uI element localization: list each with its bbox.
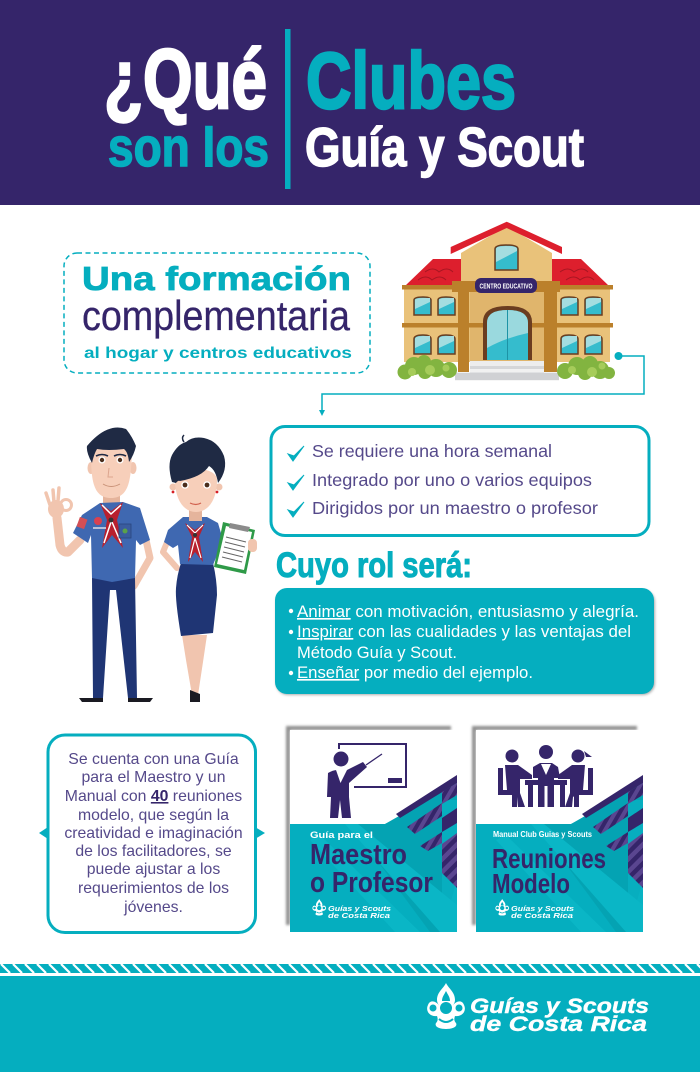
shirt	[164, 517, 223, 565]
cover logo	[312, 899, 391, 920]
cover shadow	[286, 726, 451, 925]
callout: una formación complementaria: Una formación	[82, 260, 351, 297]
eyes and smile	[98, 456, 106, 464]
cover art	[476, 730, 643, 932]
panel: guide description	[39, 735, 265, 932]
panel: guide description: requerimientos de los	[78, 880, 229, 897]
title: ¿Qué son los: son los	[108, 116, 269, 178]
connector arrow from school to list	[319, 352, 644, 416]
cover art	[290, 730, 457, 932]
footer logo: Guías y Scouts	[470, 995, 649, 1018]
panel: guide description: creatividad e imaginación	[64, 825, 243, 842]
illustration: school building	[398, 222, 615, 380]
icon: people at a table	[498, 745, 593, 807]
shoe	[190, 690, 200, 702]
panel: guide description: para el Maestro y un	[81, 769, 226, 786]
panel: role list: Enseñar por medio del ejemplo.	[297, 664, 533, 682]
title: Clubes Guía y Scout: Clubes	[306, 36, 516, 125]
illustration: scout woman	[163, 435, 257, 702]
door	[483, 306, 532, 360]
hair and bun	[170, 438, 225, 483]
footer logo	[427, 983, 649, 1036]
skirt	[176, 563, 217, 636]
footer band	[0, 964, 700, 1072]
columns and beam	[458, 290, 469, 372]
illustration: scout man	[46, 428, 153, 702]
cover logo: de Costa Rica	[511, 911, 573, 920]
icon: teacher at board	[327, 743, 407, 818]
windows	[414, 245, 602, 354]
side roofs	[406, 259, 461, 285]
sign: CENTRO EDUCATIVO	[480, 282, 533, 290]
face	[170, 484, 176, 490]
bushes	[398, 355, 615, 380]
check marks	[288, 446, 304, 517]
callout: una formación complementaria: al hogar y centros educativos	[84, 345, 352, 362]
clipboard	[214, 522, 255, 574]
badges	[77, 517, 87, 529]
cover logo	[495, 899, 574, 920]
central gable wall	[461, 226, 552, 288]
sign	[475, 278, 537, 293]
trousers	[92, 578, 137, 698]
panel: guide description: modelo, que según la	[78, 807, 229, 824]
neckerchief	[100, 502, 123, 548]
shirt	[73, 502, 150, 582]
panel: requirements checklist	[271, 426, 649, 536]
book cover: Maestro o Profesor	[286, 726, 457, 932]
book cover: Maestro o Profesor: Maestro	[310, 839, 407, 871]
hair	[87, 428, 136, 463]
walls	[404, 289, 610, 362]
header band	[0, 0, 700, 205]
panel: guide description: puede ajustar a los	[87, 861, 220, 878]
panel: role list: Método Guía y Scout.	[297, 644, 457, 662]
neck	[189, 504, 202, 521]
bands	[402, 285, 613, 290]
gable roof	[451, 222, 562, 254]
panel: guide description: jóvenes.	[123, 899, 183, 916]
other arm	[134, 540, 150, 586]
callout: una formación complementaria: complementaria	[82, 292, 351, 339]
holding hand	[248, 539, 257, 552]
neck	[103, 488, 120, 508]
cover logo: Guías y Scouts	[511, 904, 574, 913]
title divider	[285, 29, 290, 189]
callout: una formación complementaria	[64, 253, 370, 373]
panel: role list: Animar con motivación, entusiasmo y alegría.	[297, 603, 639, 621]
ears and face	[88, 462, 94, 474]
icon: fleur-de-lis	[427, 983, 465, 1029]
shoes	[79, 698, 153, 702]
title: ¿Qué son los: ¿Qué	[104, 32, 267, 126]
cover logo: de Costa Rica	[328, 911, 390, 920]
list text: Se requiere una hora semanal	[312, 441, 552, 461]
title: Clubes Guía y Scout	[305, 36, 584, 178]
panel: guide description: Se cuenta con una Guía	[68, 751, 239, 768]
eyes and mouth	[181, 481, 189, 489]
cover shadow	[472, 726, 637, 925]
panel: guide description: Manual con 40 reuniones	[65, 788, 242, 805]
panel: role list	[275, 588, 655, 695]
title: ¿Qué son los	[104, 32, 269, 178]
hand-on-hip arm	[163, 540, 177, 568]
cover logo: Guías y Scouts	[328, 904, 391, 913]
book cover: Maestro o Profesor: o Profesor	[310, 867, 433, 899]
legs	[182, 635, 207, 695]
book cover: Reuniones Modelo: Reuniones	[492, 843, 606, 874]
panel: role list: Inspirar con las cualidades y las ventajas del	[297, 623, 631, 641]
panel: guide description: de los facilitadores, se	[75, 843, 232, 860]
cover title: Manual Club Guias y Scouts	[493, 830, 593, 839]
list text: Integrado por uno o varios equipos	[312, 470, 592, 490]
steps	[470, 361, 544, 366]
bullets	[289, 609, 293, 675]
raised arm and OK hand	[57, 518, 80, 552]
list text: Dirigidos por un maestro o profesor	[312, 498, 598, 518]
title: Clubes Guía y Scout: Guía y Scout	[305, 116, 584, 178]
list text	[312, 441, 598, 518]
neckerchief	[185, 523, 205, 562]
heading: cuyo rol será: Cuyo rol será:	[276, 546, 472, 585]
book cover: Reuniones Modelo: Modelo	[492, 868, 570, 899]
book cover: Reuniones Modelo	[472, 726, 643, 932]
footer logo: de Costa Rica	[470, 1013, 647, 1036]
cover title: Guía para el	[310, 830, 373, 841]
